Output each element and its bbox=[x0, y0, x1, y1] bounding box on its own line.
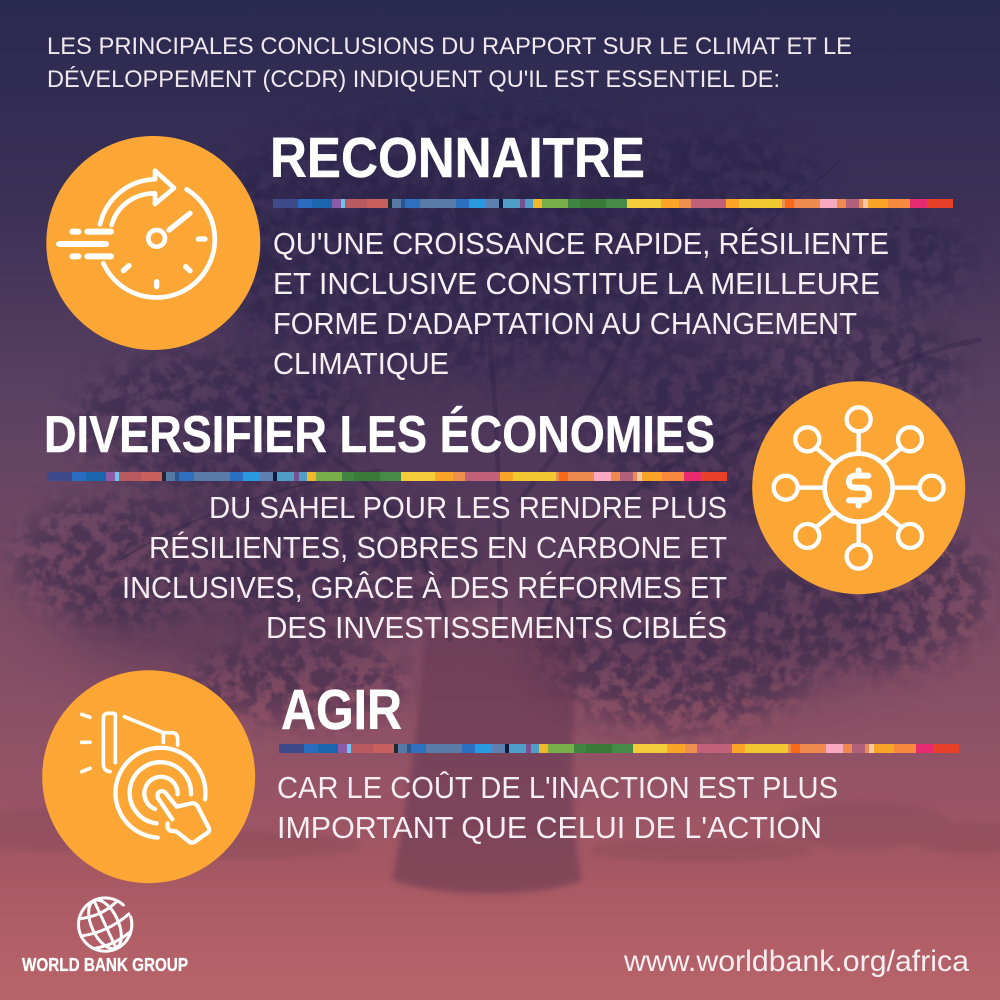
panel: diversifier bbox=[44, 381, 965, 645]
text block: diversifier: DU SAHEL POUR LES RENDRE PLUS bbox=[209, 490, 727, 525]
panel: reconnaitre bbox=[46, 126, 953, 381]
text block: diversifier bbox=[122, 490, 727, 645]
text block: reconnaitre: FORME D'ADAPTATION AU CHANGEMENT bbox=[273, 306, 857, 341]
intro text: LES PRINCIPALES CONCLUSIONS DU RAPPORT SUR LE CLIMAT ET LE bbox=[47, 33, 852, 60]
background: tree silhouette bbox=[0, 105, 1000, 894]
text block: reconnaitre: ET INCLUSIVE CONSTITUE LA MEILLEURE bbox=[273, 266, 880, 301]
icon: hand pressing button in orange circle bbox=[42, 670, 255, 883]
logo wordmark: WORLD BANK GROUP bbox=[22, 955, 188, 975]
text block: reconnaitre: QU'UNE CROISSANCE RAPIDE, RÉSILIENTE bbox=[273, 226, 889, 261]
text block: reconnaitre bbox=[273, 226, 889, 381]
text block: agir: IMPORTANT QUE CELUI DE L'ACTION bbox=[277, 810, 822, 845]
text block: agir: CAR LE COÛT DE L'INACTION EST PLUS bbox=[277, 770, 838, 805]
intro text bbox=[47, 33, 852, 93]
icon: globe bbox=[70, 890, 140, 959]
text block: agir bbox=[277, 770, 838, 845]
icon: stopwatch in orange circle bbox=[46, 136, 260, 350]
heading: reconnaitre: RECONNAITRE bbox=[270, 126, 645, 190]
text block: diversifier: INCLUSIVES, GRÂCE À DES RÉFORMES ET bbox=[122, 570, 727, 605]
icon: dollar network in orange circle bbox=[752, 381, 965, 594]
heading: diversifier les economies: DIVERSIFIER LES ÉCONOMIES bbox=[44, 406, 715, 464]
panel: agir bbox=[42, 670, 959, 883]
colour stripe bbox=[279, 744, 959, 753]
text block: reconnaitre: CLIMATIQUE bbox=[273, 346, 449, 381]
colour stripe bbox=[273, 199, 953, 208]
website url: www.worldbank.org/africa bbox=[623, 945, 969, 978]
intro text: DÉVELOPPEMENT (CCDR) INDIQUENT QU'IL EST ESSENTIEL DE: bbox=[47, 66, 780, 93]
heading: agir: AGIR bbox=[281, 678, 402, 742]
colour stripe bbox=[47, 472, 727, 481]
text block: diversifier: DES INVESTISSEMENTS CIBLÉS bbox=[266, 610, 727, 645]
logo: world bank group bbox=[22, 890, 188, 975]
text block: diversifier: RÉSILIENTES, SOBRES EN CARBONE ET bbox=[149, 530, 727, 565]
